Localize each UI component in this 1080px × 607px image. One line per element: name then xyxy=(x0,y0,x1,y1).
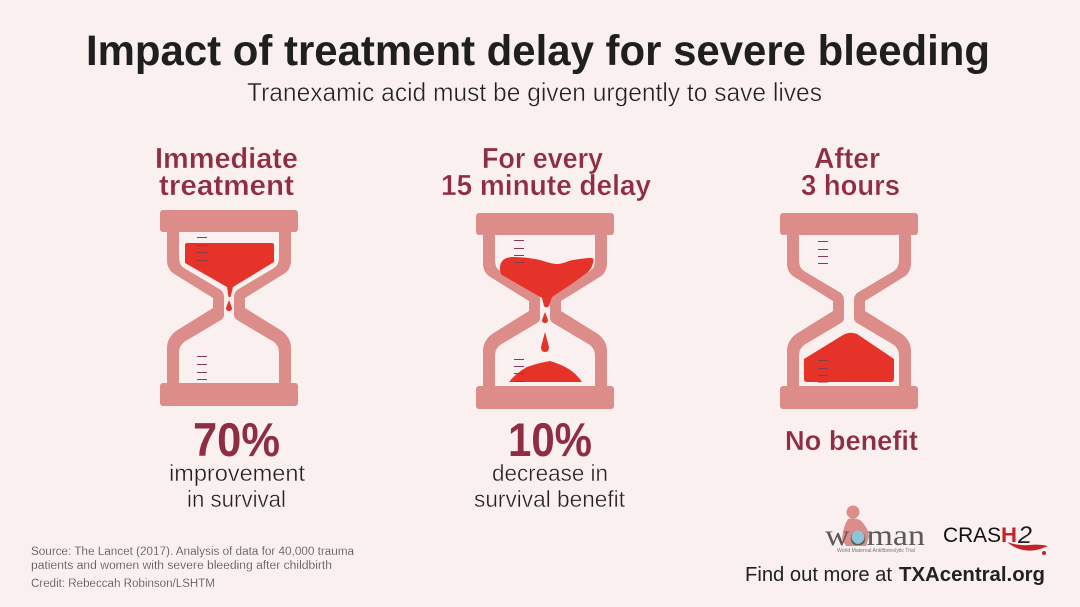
heading: for every 15 minute delay xyxy=(441,143,651,202)
source and credit: Credit: Rebeccah Robinson/LSHTM xyxy=(31,578,215,590)
logo: CRASH-2 trial: 2 xyxy=(1017,522,1032,549)
heading: for every 15 minute delay: For every xyxy=(482,143,603,175)
logo: WOMAN trial: World Maternal Antifibrinolytic Trial xyxy=(837,548,915,554)
call to action: TXAcentral.org xyxy=(899,564,1045,586)
icon: hourglass nearly full xyxy=(160,210,298,406)
icon: hourglass draining xyxy=(476,213,614,409)
call to action: Find out more at xyxy=(745,564,892,586)
logo: WOMAN trial: woman xyxy=(825,519,925,552)
label: decrease in survival benefit: decrease in xyxy=(492,460,608,486)
logo: CRASH-2 trial: H xyxy=(1001,524,1017,547)
label: improvement in survival xyxy=(169,460,306,512)
stat: 10%: 10% xyxy=(508,413,592,466)
label: decrease in survival benefit: survival benefit xyxy=(474,486,626,512)
label: improvement in survival: improvement xyxy=(169,460,306,486)
source and credit: Source: The Lancet (2017). Analysis of data for 40,000 trauma xyxy=(31,546,355,558)
logo: CRASH-2 trial: CRAS xyxy=(943,524,1001,547)
panel: immediate treatment xyxy=(155,143,306,512)
heading: immediate treatment: Immediate xyxy=(155,143,298,175)
heading: immediate treatment xyxy=(155,143,298,202)
panel: every 15 minute delay xyxy=(441,143,651,512)
label: decrease in survival benefit xyxy=(474,460,626,512)
subtitle: Tranexamic acid must be given urgently to save lives xyxy=(247,77,822,107)
heading: after 3 hours: After xyxy=(814,143,880,175)
logo: CRASH-2 trial xyxy=(943,522,1048,555)
source and credit xyxy=(31,546,355,590)
label: improvement in survival: in survival xyxy=(187,486,286,512)
heading: after 3 hours: 3 hours xyxy=(801,170,900,202)
logo: WOMAN trial xyxy=(825,506,925,554)
heading: immediate treatment: treatment xyxy=(159,170,294,202)
stat: 70%: 70% xyxy=(193,413,280,466)
heading: for every 15 minute delay: 15 minute delay xyxy=(441,170,651,202)
panel: after 3 hours xyxy=(780,143,918,456)
heading: after 3 hours xyxy=(801,143,900,202)
title: Impact of treatment delay for severe bleeding xyxy=(86,27,990,75)
source and credit: patients and women with severe bleeding after childbirth xyxy=(31,560,332,572)
icon: hourglass emptied xyxy=(780,213,918,409)
label: no benefit: No benefit xyxy=(785,425,918,456)
